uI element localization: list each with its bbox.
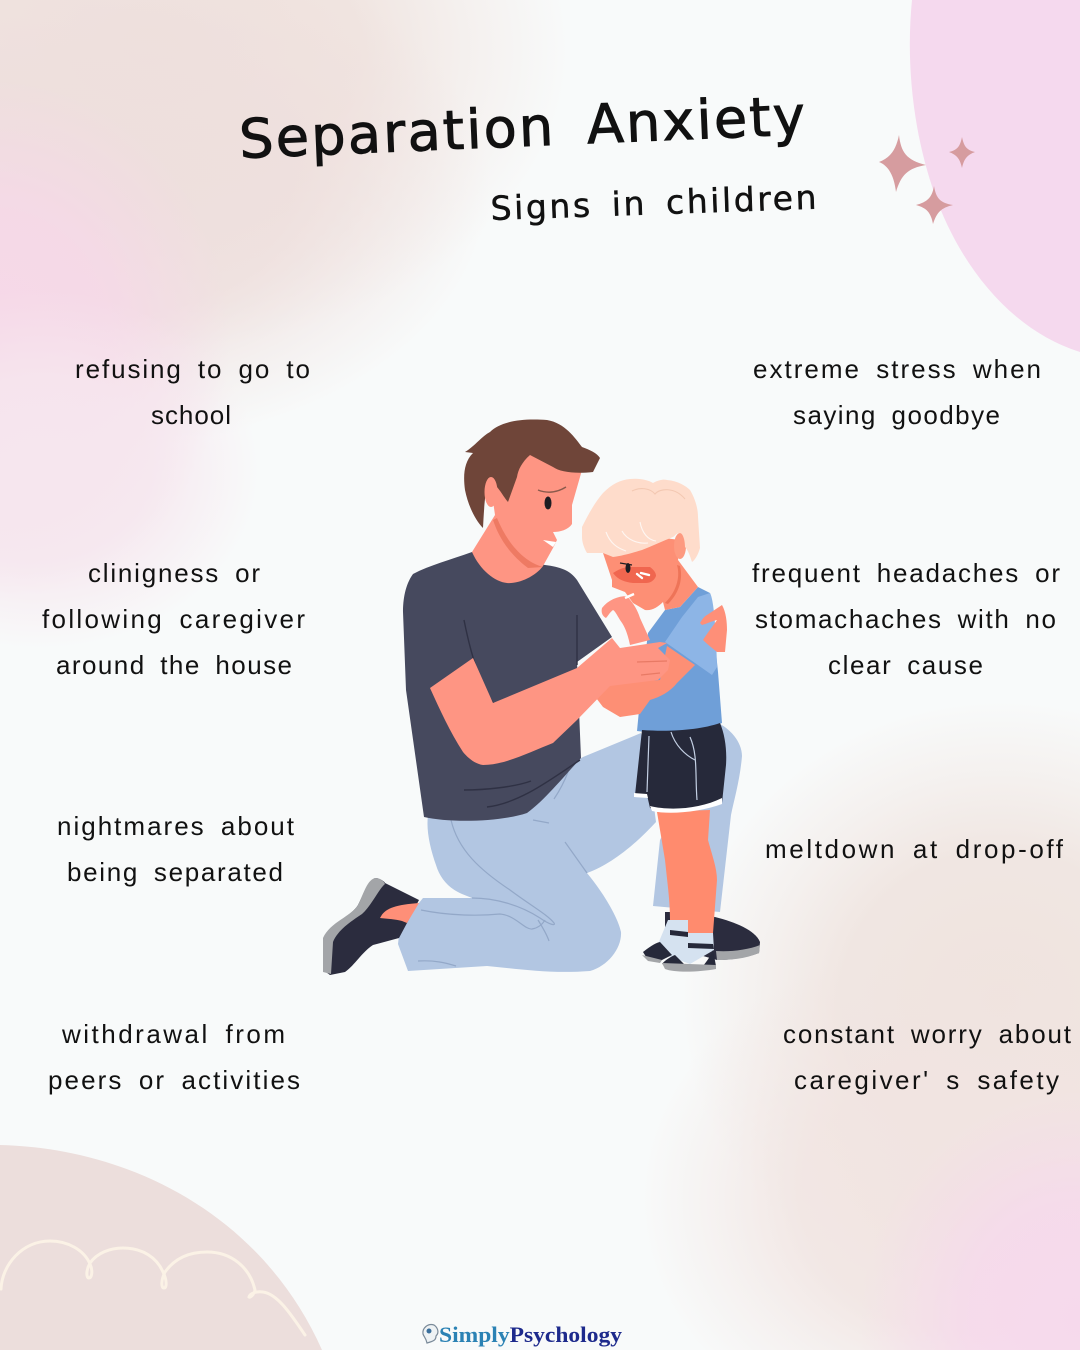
right sign 1: saying goodbye — [793, 400, 1000, 430]
man's far shoe — [665, 912, 760, 960]
left sign 1: school — [151, 400, 231, 430]
boy's shirt — [637, 587, 722, 733]
man's hair — [464, 420, 600, 528]
left sign 2: following caregiver — [42, 604, 305, 634]
left sign 3 — [57, 811, 295, 887]
boy's ear — [674, 533, 686, 559]
right sign 2: stomachaches with no — [755, 604, 1056, 634]
boy's raised arm and tear — [602, 594, 650, 645]
man's arm reaching child — [430, 638, 670, 765]
left sign 3: being separated — [67, 857, 283, 887]
man's pants — [398, 733, 656, 972]
right sign 3: meltdown at drop-off — [765, 834, 1064, 864]
right sign 1: extreme stress when — [753, 354, 1041, 384]
icon: head with brain — [423, 1325, 438, 1343]
right sign 2: frequent headaches or — [752, 558, 1060, 588]
decorative beige blob, bottom left — [0, 1145, 322, 1350]
right sign 4: constant worry about — [783, 1019, 1072, 1049]
man's eye, brow and mouth — [538, 487, 566, 547]
man's hand on boy's shoulder — [700, 605, 727, 652]
boy's near arm — [590, 646, 695, 717]
left sign 1: refusing to go to — [75, 354, 310, 384]
right sign 4: caregiver' s safety — [794, 1065, 1059, 1095]
left sign 1 — [75, 354, 310, 430]
icon: sparkles — [879, 135, 975, 224]
left sign 3: nightmares about — [57, 811, 295, 841]
left sign 2: around the house — [56, 650, 292, 680]
left sign 4: peers or activities — [48, 1065, 300, 1095]
boy's shorts — [634, 723, 726, 813]
left sign 2: clinigness or — [88, 558, 260, 588]
title: Separation Anxiety — [238, 84, 806, 171]
man's shirt — [403, 552, 612, 821]
boy's socks and shoes — [642, 920, 716, 972]
right sign 2 — [752, 558, 1060, 680]
man's far leg — [653, 722, 742, 912]
subtitle: Signs in children — [490, 178, 817, 228]
illustration: father comforting crying child — [323, 420, 760, 975]
right sign 2: clear cause — [828, 650, 983, 680]
right sign 4 — [783, 1019, 1072, 1095]
decorative cloud line — [1, 1241, 305, 1335]
man's ear — [484, 477, 498, 507]
boy's hair — [582, 479, 700, 562]
boy's leg — [657, 810, 717, 933]
left sign 4: withdrawal from — [61, 1019, 285, 1049]
man's neck and face — [472, 452, 582, 583]
logo: Simply Psychology: SimplyPsychology — [439, 1322, 622, 1347]
boy's neck and face — [603, 535, 698, 610]
right sign 1 — [753, 354, 1041, 430]
left sign 4 — [48, 1019, 300, 1095]
left sign 2 — [42, 558, 305, 680]
man's near shoe — [323, 878, 419, 975]
decorative pink blob, top right — [910, 0, 1080, 352]
